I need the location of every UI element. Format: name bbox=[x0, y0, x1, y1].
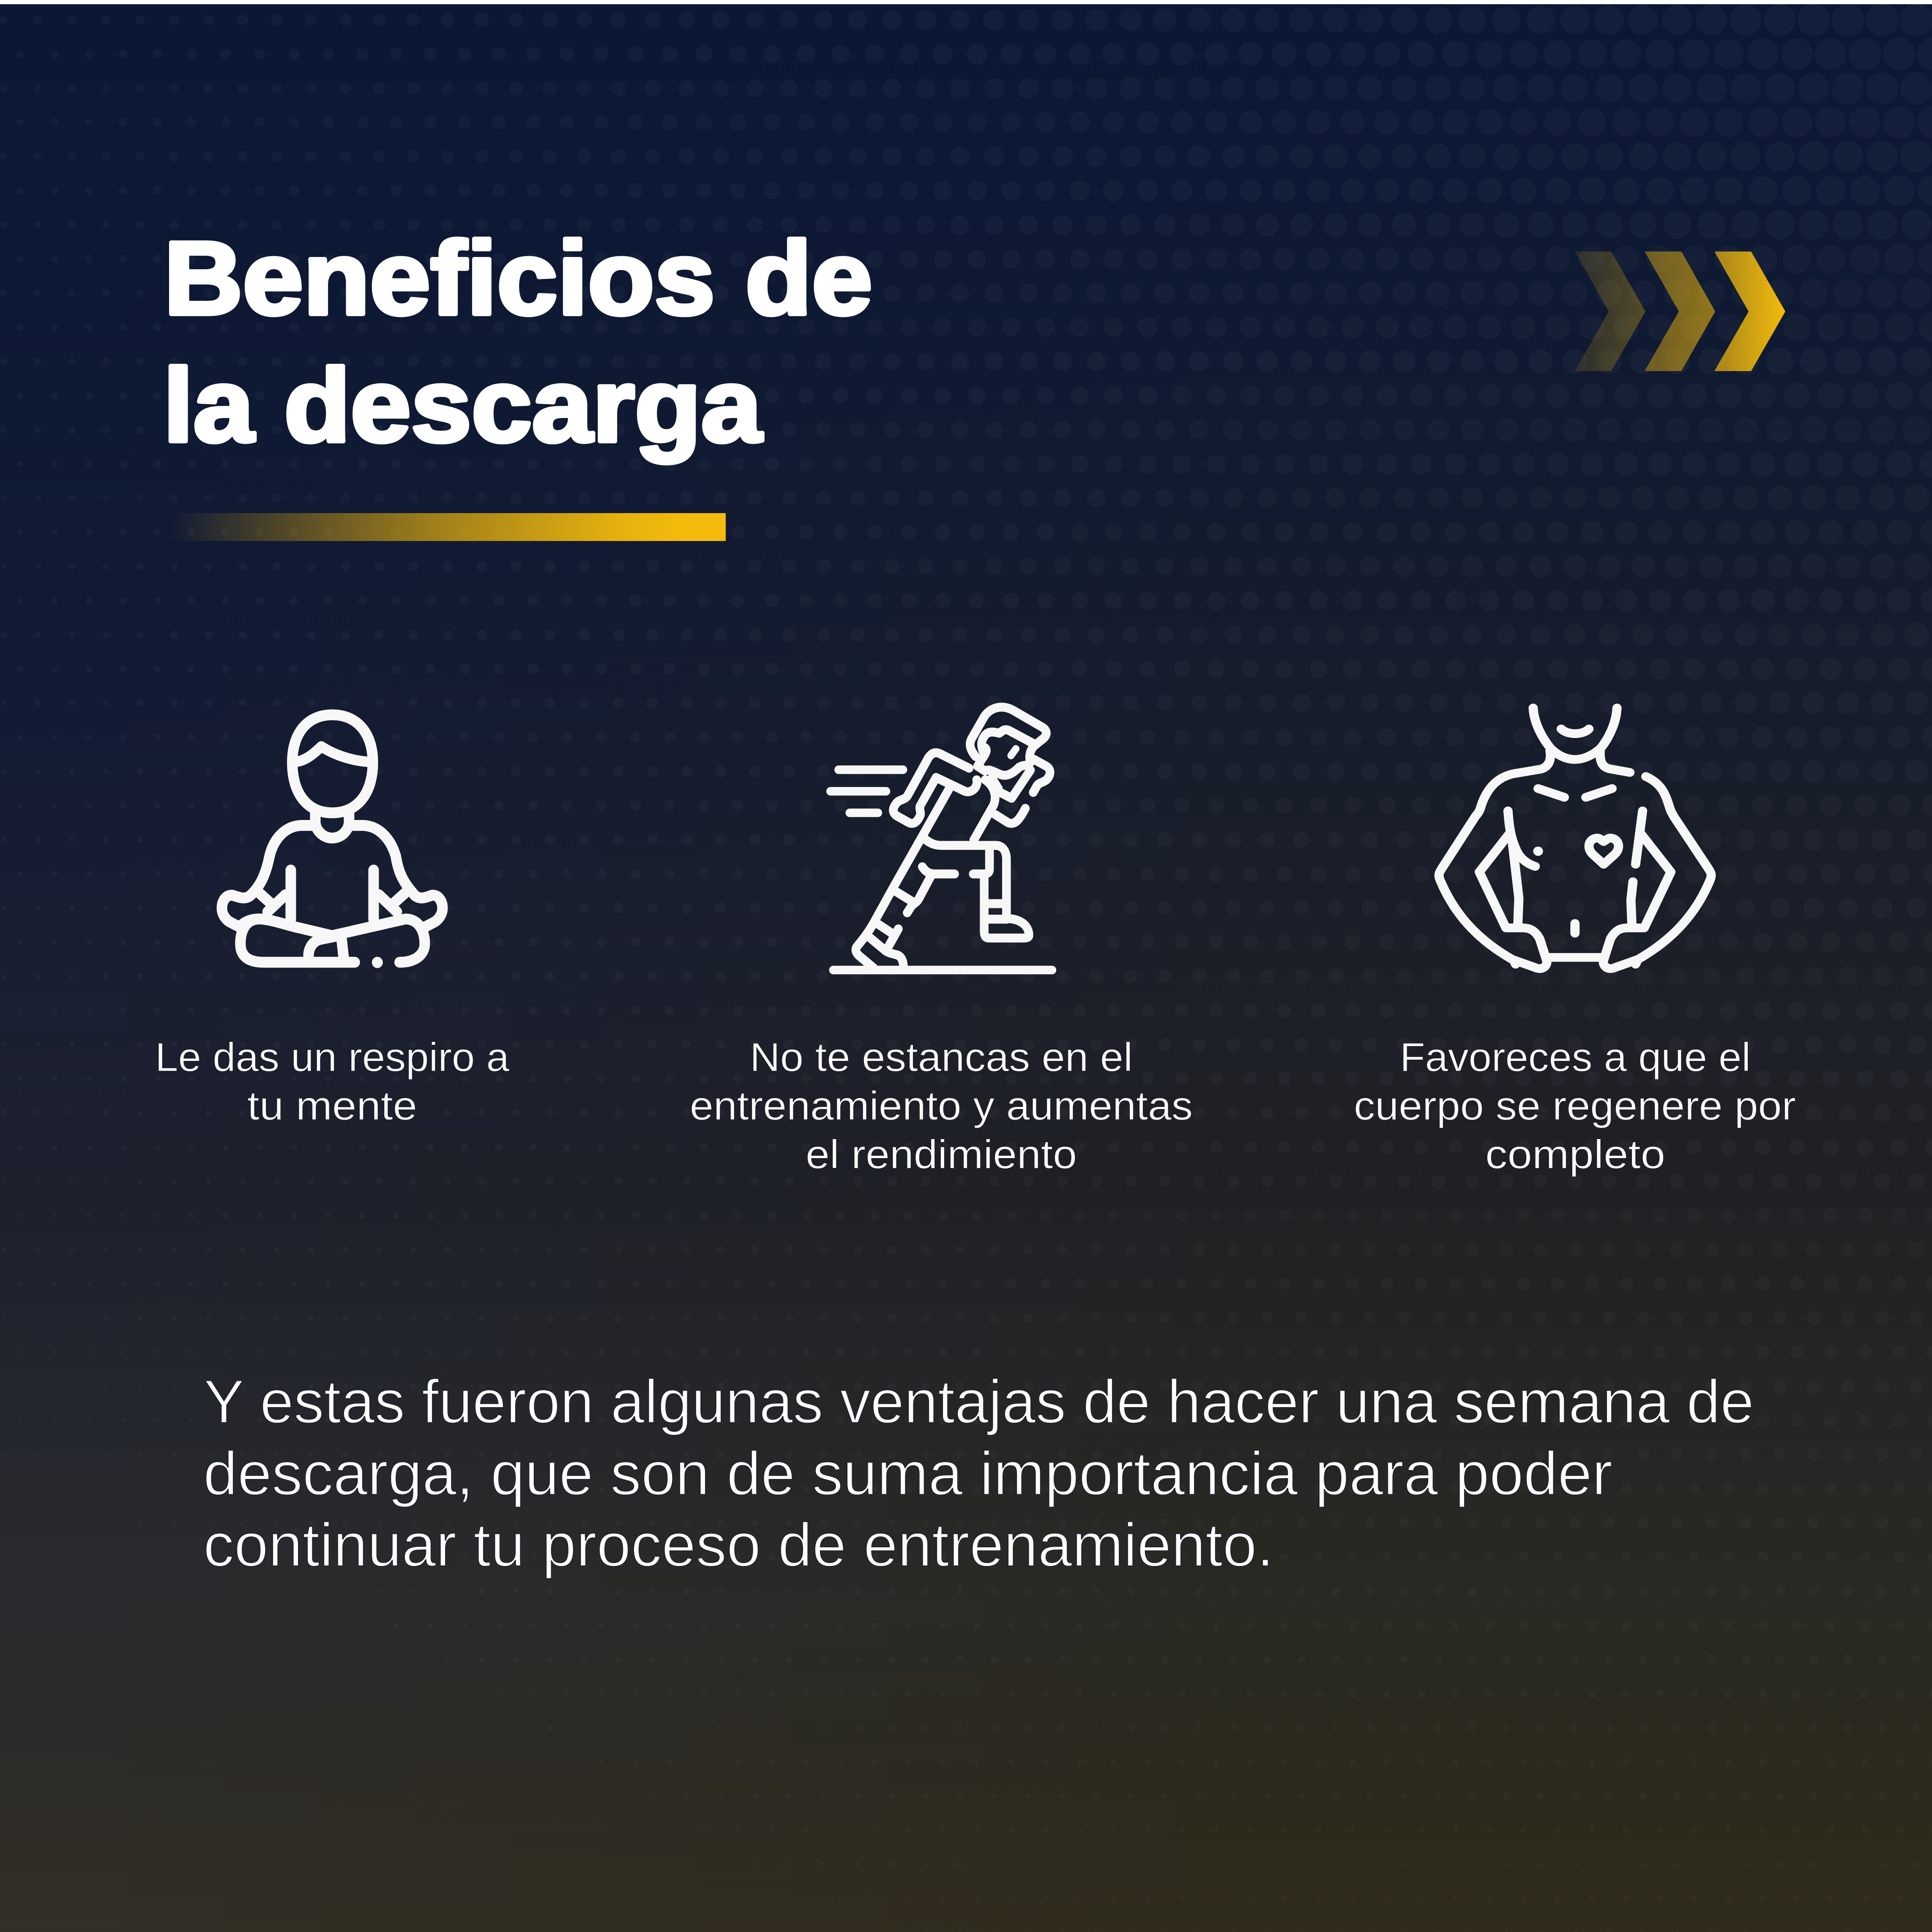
icon: three gold chevrons bbox=[1575, 251, 1785, 371]
closing paragraph bbox=[203, 1367, 1754, 1579]
title: Beneficios de bbox=[164, 220, 872, 336]
closing paragraph: Y estas fueron algunas ventajas de hacer una semana de bbox=[204, 1367, 1754, 1436]
text: benefit 1: Le das un respiro a bbox=[155, 1035, 510, 1080]
closing paragraph: continuar tu proceso de entrenamiento. bbox=[203, 1511, 1274, 1579]
background: dot-free lower-left corner bbox=[0, 1479, 845, 1932]
icon: person meditating bbox=[222, 715, 443, 968]
text: benefit 1 bbox=[155, 1035, 510, 1129]
icon: torso with heart bbox=[1439, 708, 1711, 969]
text: benefit 2 bbox=[690, 1035, 1193, 1177]
title: la descarga bbox=[163, 347, 762, 464]
text: benefit 1: tu mente bbox=[247, 1083, 417, 1129]
text: benefit 3 bbox=[1354, 1035, 1796, 1177]
text: benefit 3: Favoreces a que el bbox=[1400, 1035, 1751, 1080]
title underline gradient bar bbox=[169, 513, 726, 541]
closing paragraph: descarga, que son de suma importancia para poder bbox=[203, 1439, 1612, 1508]
text: benefit 3: cuerpo se regenere por bbox=[1354, 1083, 1796, 1129]
text: benefit 3: completo bbox=[1485, 1132, 1665, 1177]
text: benefit 2: No te estancas en el bbox=[750, 1035, 1133, 1080]
text: benefit 2: entrenamiento y aumentas bbox=[690, 1083, 1193, 1129]
text: benefit 2: el rendimiento bbox=[806, 1132, 1077, 1177]
icon: person running bbox=[831, 707, 1052, 970]
title bbox=[163, 220, 872, 464]
